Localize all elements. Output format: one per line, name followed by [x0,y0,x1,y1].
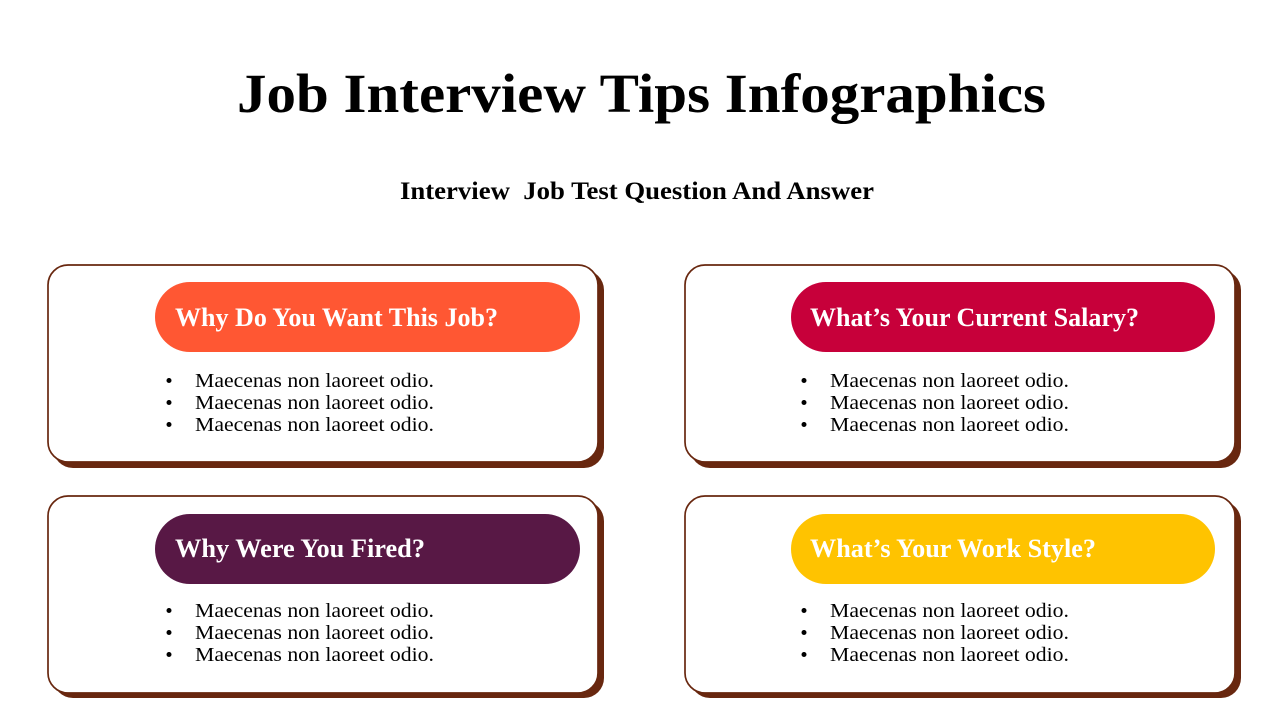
bullet list: Maecenas non laoreet odio. [195,370,434,392]
bullet list [166,600,434,666]
heading pill: why do you want this job: Why Do You Want This Job? [175,303,498,332]
bullet list: Maecenas non laoreet odio. [195,622,434,644]
bullet list: Maecenas non laoreet odio. [195,644,434,666]
bullet list [802,370,1069,436]
heading pill: what's your current salary: What’s Your Current Salary? [810,303,1139,332]
bullet list: Maecenas non laoreet odio. [830,392,1069,414]
panel: what's your work style [685,496,1241,698]
bullet list: Maecenas non laoreet odio. [830,600,1069,622]
bullet list [166,370,434,436]
heading pill: what's your work style: What’s Your Work Style? [810,534,1096,563]
bullet list: Maecenas non laoreet odio. [195,600,434,622]
bullet list: Maecenas non laoreet odio. [830,622,1069,644]
heading pill: why were you fired: Why Were You Fired? [175,534,425,563]
heading pill: what's your current salary [791,282,1215,352]
panel: why were you fired [48,496,604,698]
heading pill: why were you fired [155,514,580,584]
bullet list: Maecenas non laoreet odio. [195,414,434,436]
panel: why do you want this job [48,265,604,468]
bullet list: Maecenas non laoreet odio. [830,414,1069,436]
heading pill: what's your work style [791,514,1215,584]
title: Job Interview Tips Infographics [237,63,1046,124]
heading pill: why do you want this job [155,282,580,352]
bullet list: Maecenas non laoreet odio. [830,370,1069,392]
subtitle: Interview Job Test Question And Answer [400,176,874,205]
panel: what's your current salary [685,265,1241,468]
bullet list [802,600,1069,666]
bullet list: Maecenas non laoreet odio. [830,644,1069,666]
bullet list: Maecenas non laoreet odio. [195,392,434,414]
